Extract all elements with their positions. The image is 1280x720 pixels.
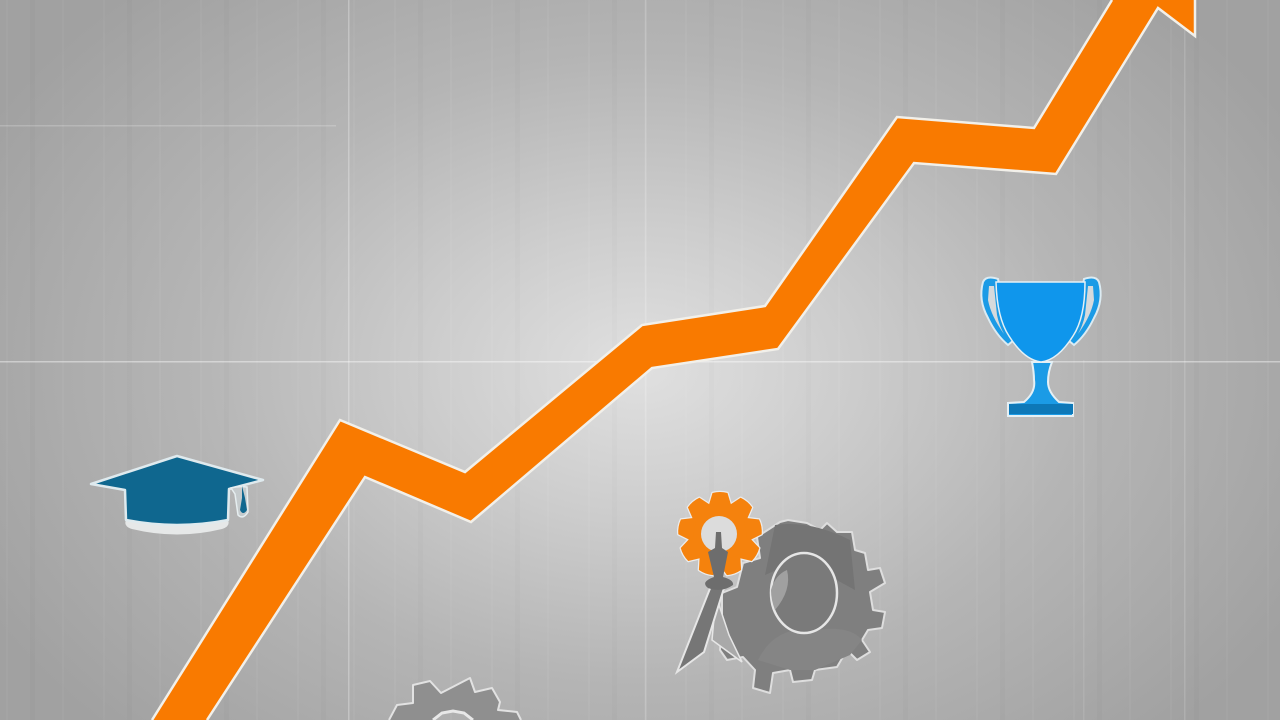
icon: trophy (981, 278, 1101, 416)
icon: gear bottom (389, 678, 521, 720)
icon: large gear (720, 520, 885, 693)
icon: orange gear with compass (677, 492, 763, 672)
compass tower (677, 532, 742, 672)
icon: graduation cap (91, 456, 263, 534)
